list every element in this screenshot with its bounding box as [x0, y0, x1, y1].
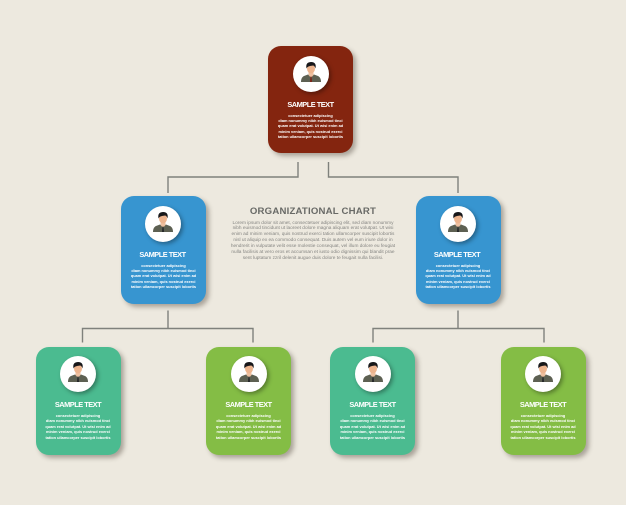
card: right manager [416, 196, 500, 304]
body text: tation ullamcorper suscipit lobortis [425, 284, 491, 289]
heading: SAMPLE TEXT [139, 250, 186, 258]
body text: diam nonummy nibh euismod tinci [216, 418, 281, 423]
body text: minim veniam, quis nostrud exerci [132, 279, 196, 284]
card: staff 3 [330, 346, 415, 454]
description [231, 220, 395, 261]
heading: SAMPLE TEXT [225, 400, 272, 409]
body text: diam nonummy nibh euismod tinci [426, 268, 490, 273]
heading: SAMPLE TEXT [520, 400, 566, 409]
title and description [231, 206, 395, 261]
body text [45, 413, 111, 440]
body text: tation ullamcorper suscipit lobortis [45, 435, 111, 440]
body text: tation ullamcorper suscipit lobortis [510, 435, 576, 440]
icon: person [145, 206, 181, 242]
card: staff 1 [36, 346, 120, 454]
body text: consectetuer adipiscing [56, 413, 100, 418]
card: left manager [121, 196, 206, 304]
heading: SAMPLE TEXT [287, 100, 334, 108]
icon: person [60, 356, 96, 392]
body text: quam erat volutpat. Ut wisi enim ad [340, 424, 405, 429]
body text: diam nonummy nibh euismod tinci [46, 418, 110, 423]
body text [510, 413, 576, 440]
body text: diam nonummy nibh euismod tinci [340, 418, 405, 423]
description: nisl ut aliquip ex ea commodo consequat. Duis autem vel eum iriure dolor in [233, 238, 393, 243]
body text: quam erat volutpat. Ut wisi enim ad [216, 424, 281, 429]
icon: person [525, 356, 561, 392]
description: enim ad minim veniam, quis nostrud exerci tation ullamcorper suscipit lobortis [232, 232, 394, 237]
body text: consectetuer adipiscing [521, 413, 565, 418]
body text: tation ullamcorper suscipit lobortis [278, 134, 343, 139]
card: staff 2 [206, 346, 291, 454]
body text [216, 413, 281, 440]
body text [340, 413, 405, 440]
body text: minim veniam, quis nostrud exerci [426, 279, 490, 284]
body text: diam nonummy nibh euismod tinci [511, 418, 575, 423]
description: sent luptatum zzril delenit augue duis dolore te feugait nulla facilisi. [243, 256, 383, 261]
body text: tation ullamcorper suscipit lobortis [340, 435, 405, 440]
description: Lorem ipsum dolor sit amet, consectetuer adipiscing elit, sed diam nonummy [232, 220, 394, 226]
heading: SAMPLE TEXT [55, 400, 101, 409]
body text: consectetuer adipiscing [288, 112, 333, 118]
body text: tation ullamcorper suscipit lobortis [131, 284, 196, 289]
body text: quam erat volutpat. Ut wisi enim ad [425, 273, 491, 278]
body text [425, 262, 491, 289]
heading: SAMPLE TEXT [349, 400, 396, 409]
icon: person [292, 56, 328, 92]
body text [131, 262, 196, 289]
body text: consectetuer adipiscing [436, 262, 480, 268]
body text: minim veniam, quis nostrud exerci [340, 429, 404, 434]
body text: consectetuer adipiscing [350, 413, 395, 418]
body text: diam nonummy nibh euismod tinci [131, 268, 196, 273]
body text: tation ullamcorper suscipit lobortis [216, 435, 281, 440]
description: nulla facilisis at vero eros et accumsan et iusto odio dignissim qui blandit prae [231, 250, 395, 255]
description: nibh euismod tincidunt ut laoreet dolore magna aliquam erat volutpat. Ut wisi [233, 226, 393, 231]
card: top executive [268, 46, 353, 153]
body text: minim veniam, quis nostrud exerci [511, 429, 575, 434]
body text: quam erat volutpat. Ut wisi enim ad [131, 273, 196, 278]
body text: quam erat volutpat. Ut wisi enim ad [45, 424, 111, 429]
title: ORGANIZATIONAL CHART [250, 206, 376, 216]
card: staff 4 [500, 346, 586, 454]
body text: quam erat volutpat. Ut wisi enim ad [510, 424, 576, 429]
body text: minim veniam, quis nostrud exerci [278, 129, 342, 134]
body text: consectetuer adipiscing [141, 262, 186, 268]
icon: person [230, 356, 266, 392]
heading: SAMPLE TEXT [434, 250, 480, 258]
body text: minim veniam, quis nostrud exerci [216, 429, 280, 434]
icon: person [440, 206, 476, 242]
body text: minim veniam, quis nostrud exerci [46, 429, 110, 434]
icon: person [354, 356, 390, 392]
body text: consectetuer adipiscing [226, 413, 271, 418]
body text: quam erat volutpat. Ut wisi enim ad [278, 123, 343, 128]
body text [278, 112, 343, 139]
description: hendrerit in vulputate velit esse molestie consequat, vel illum dolore eu feugiat [231, 244, 395, 249]
body text: diam nonummy nibh euismod tinci [278, 118, 343, 123]
